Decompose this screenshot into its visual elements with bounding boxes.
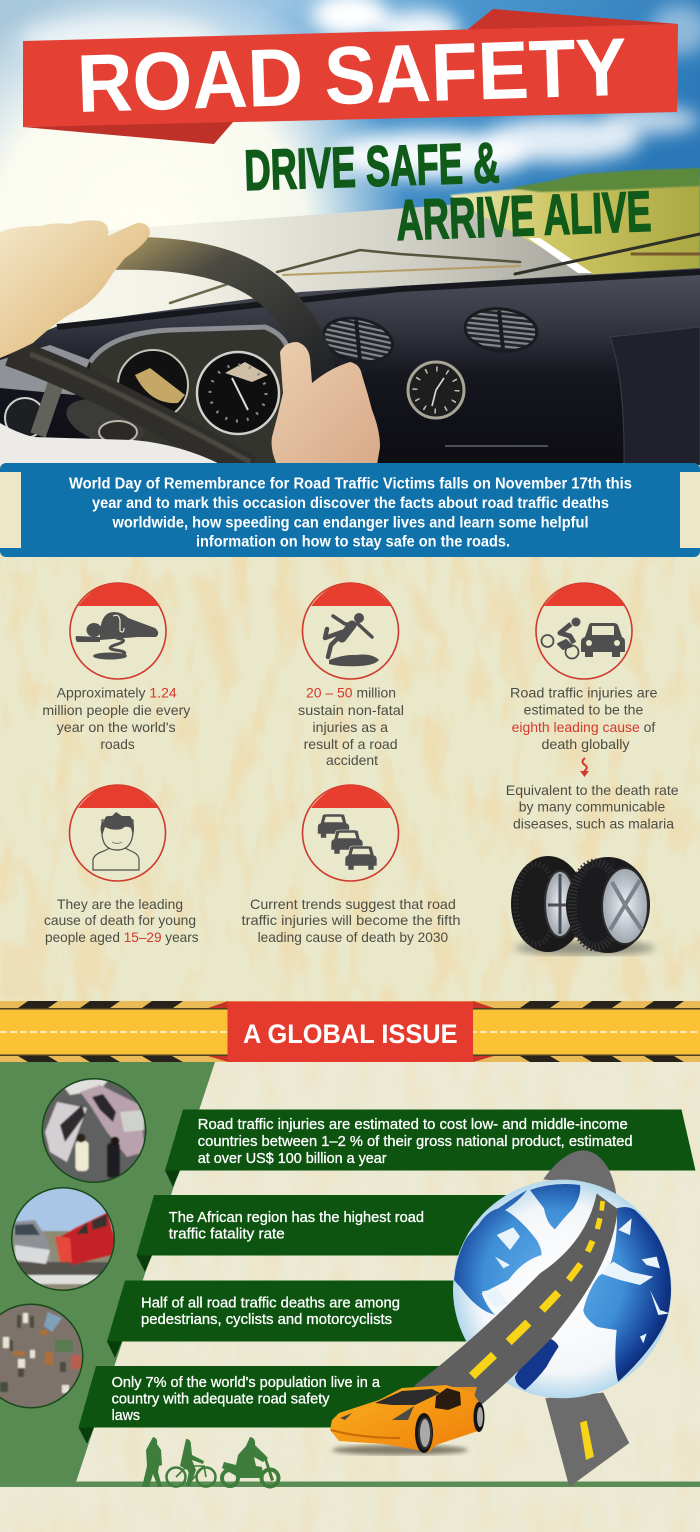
ribbon text: laws <box>112 1407 140 1424</box>
sky <box>0 0 700 268</box>
fact text: sustain non-fatal <box>298 702 404 718</box>
fact text: estimated to be the <box>524 702 644 718</box>
fact: deaths per year <box>42 583 190 752</box>
ribbon text: The African region has the highest road <box>169 1209 424 1226</box>
sports car <box>330 1385 484 1455</box>
fact text <box>42 684 190 752</box>
subtitle line 1: DRIVE SAFE & <box>243 131 500 203</box>
gauge: speedometer <box>197 352 279 434</box>
photo: collided silver cars <box>40 1075 150 1185</box>
tree line <box>510 168 700 192</box>
section heading box <box>228 1002 473 1062</box>
fact text: cause of death for young <box>44 912 196 928</box>
dashboard <box>0 268 700 465</box>
lane marking <box>528 238 592 273</box>
south atlantic <box>515 1338 559 1390</box>
ribbon text <box>141 1294 400 1328</box>
title: ROAD SAFETY <box>76 22 628 130</box>
headlights <box>340 1406 414 1420</box>
ribbon text: traffic fatality rate <box>169 1226 285 1242</box>
equivalent text: Equivalent to the death rate <box>506 782 679 798</box>
ribbon text: Road traffic injuries are estimated to cost low- and middle-income <box>198 1116 628 1133</box>
ribbon text: pedestrians, cyclists and motorcyclists <box>141 1311 392 1328</box>
bumper vent <box>331 1430 400 1438</box>
fact: young people <box>44 785 199 945</box>
body <box>330 1385 484 1452</box>
fact text: eighth leading cause of <box>512 719 655 735</box>
globe <box>451 1180 672 1398</box>
paper texture: upper panel <box>0 557 700 1532</box>
dashboard top edge <box>57 272 700 327</box>
icon: young man <box>70 785 166 881</box>
road <box>48 204 592 330</box>
icon: body on road <box>70 583 166 679</box>
spoiler <box>445 1387 477 1397</box>
field <box>450 178 700 285</box>
gauge: fuel <box>118 350 188 420</box>
fact: eighth leading cause <box>506 583 679 832</box>
arrow: squiggle down <box>580 758 589 777</box>
steering wheel <box>10 253 322 470</box>
fact text: leading cause of death by 2030 <box>258 929 448 945</box>
rear wheel <box>474 1402 484 1432</box>
left tyre <box>511 856 585 952</box>
side window <box>435 1388 461 1410</box>
fact text: accident <box>326 752 378 768</box>
windshield <box>375 1389 440 1405</box>
left hand <box>0 220 150 358</box>
hero photo: driver at steering wheel <box>0 0 700 470</box>
ribbon tab right <box>473 1001 494 1062</box>
lower road dash <box>580 1421 594 1460</box>
road stripes <box>0 1001 700 1062</box>
road behind globe <box>543 1150 618 1208</box>
ribbon text <box>169 1209 424 1242</box>
air vent right <box>463 305 539 355</box>
fact text: traffic injuries will become the fifth <box>242 912 460 928</box>
intro panel <box>0 463 700 557</box>
road below globe <box>545 1393 629 1487</box>
green side panel <box>0 1062 215 1482</box>
intro text: worldwide, how speeding can endanger lives and learn some helpful <box>112 514 589 532</box>
ashtray line <box>445 446 548 447</box>
fact text: million people die every <box>42 702 190 718</box>
fact text <box>242 896 460 945</box>
banner fold bottom <box>23 121 234 144</box>
intro text: information on how to stay safe on the roads. <box>196 534 510 550</box>
sleeve <box>0 423 222 465</box>
americas ocean <box>451 1190 542 1315</box>
wipers <box>170 234 700 303</box>
intro text <box>69 476 632 550</box>
equivalent text: by many communicable <box>519 798 665 814</box>
tyres <box>511 856 655 955</box>
intro text: World Day of Remembrance for Road Traffic Victims falls on November 17th this <box>69 476 632 492</box>
icon: queue of cars <box>302 785 398 881</box>
right hand <box>272 342 380 465</box>
ribbon text <box>198 1116 633 1167</box>
ribbon text: Only 7% of the world's population live in a <box>112 1374 381 1391</box>
motorcyclist <box>222 1437 278 1486</box>
banner fold top <box>467 9 678 30</box>
ribbon 4 <box>78 1366 440 1444</box>
fact: trend to 2030 <box>242 785 460 945</box>
cyclist <box>166 1439 216 1486</box>
fact text: Approximately 1.24 <box>57 684 177 700</box>
ribbon text <box>112 1374 381 1424</box>
pedestrian <box>142 1437 162 1487</box>
dashboard clock <box>408 362 464 418</box>
fact text: 20 – 50 million <box>306 684 396 700</box>
icon: cyclist and car <box>536 583 632 679</box>
fact text <box>510 684 658 752</box>
section band <box>0 1001 700 1062</box>
clouds <box>20 0 700 179</box>
ribbon text: countries between 1–2 % of their gross national product, estimated <box>198 1133 633 1150</box>
ribbon 1 <box>165 1110 696 1187</box>
gauge: small left <box>5 398 45 438</box>
fact text: They are the leading <box>57 896 183 912</box>
glovebox panel <box>610 327 700 465</box>
instrument hood <box>90 325 290 465</box>
fact text: people aged 15–29 years <box>45 929 199 945</box>
ribbon text: Half of all road traffic deaths are among <box>141 1294 400 1312</box>
ribbon 3 <box>107 1280 500 1358</box>
air vent left <box>322 316 394 360</box>
section heading: A GLOBAL ISSUE <box>243 1019 458 1049</box>
equivalent text: diseases, such as malaria <box>513 816 674 832</box>
ribbon 2 <box>136 1195 520 1272</box>
fact text: roads <box>100 736 135 752</box>
right tyre <box>566 857 650 953</box>
ribbon tab left <box>208 1001 228 1062</box>
fact text: year on the world's <box>57 719 176 735</box>
sunlight glow <box>0 0 404 232</box>
road dashes <box>472 1201 603 1376</box>
photo: head-on crash <box>10 1187 116 1294</box>
intro text: year and to mark this occasion discover the facts about road traffic deaths <box>92 495 609 512</box>
africa ocean <box>583 1207 671 1382</box>
photo: crowded street <box>0 1303 85 1413</box>
red title banner <box>23 24 678 127</box>
ribbon text: at over US$ 100 billion a year <box>198 1150 387 1167</box>
left tab <box>0 472 21 548</box>
fact text: result of a road <box>304 736 398 752</box>
fact text: Current trends suggest that road <box>250 896 456 912</box>
silhouettes: pedestrian, cyclist, motorcyclist <box>142 1437 278 1487</box>
fact text <box>298 684 404 768</box>
equivalent text <box>506 782 679 832</box>
right tab <box>680 472 700 548</box>
fact: non-fatal injuries <box>298 583 404 768</box>
road over globe <box>407 1193 618 1440</box>
front wheel <box>415 1413 433 1453</box>
globe with road <box>407 1150 672 1487</box>
icon: falling person <box>302 583 398 679</box>
fact text: death globally <box>542 736 630 752</box>
ribbon text: country with adequate road safety <box>112 1390 330 1408</box>
ground line <box>0 1482 700 1487</box>
fact text <box>44 896 199 945</box>
landmass highlights <box>482 1218 670 1343</box>
fact text: injuries as a <box>312 719 388 735</box>
fact text: Road traffic injuries are <box>510 684 658 700</box>
north atlantic <box>530 1184 580 1229</box>
left dash area <box>0 345 90 395</box>
